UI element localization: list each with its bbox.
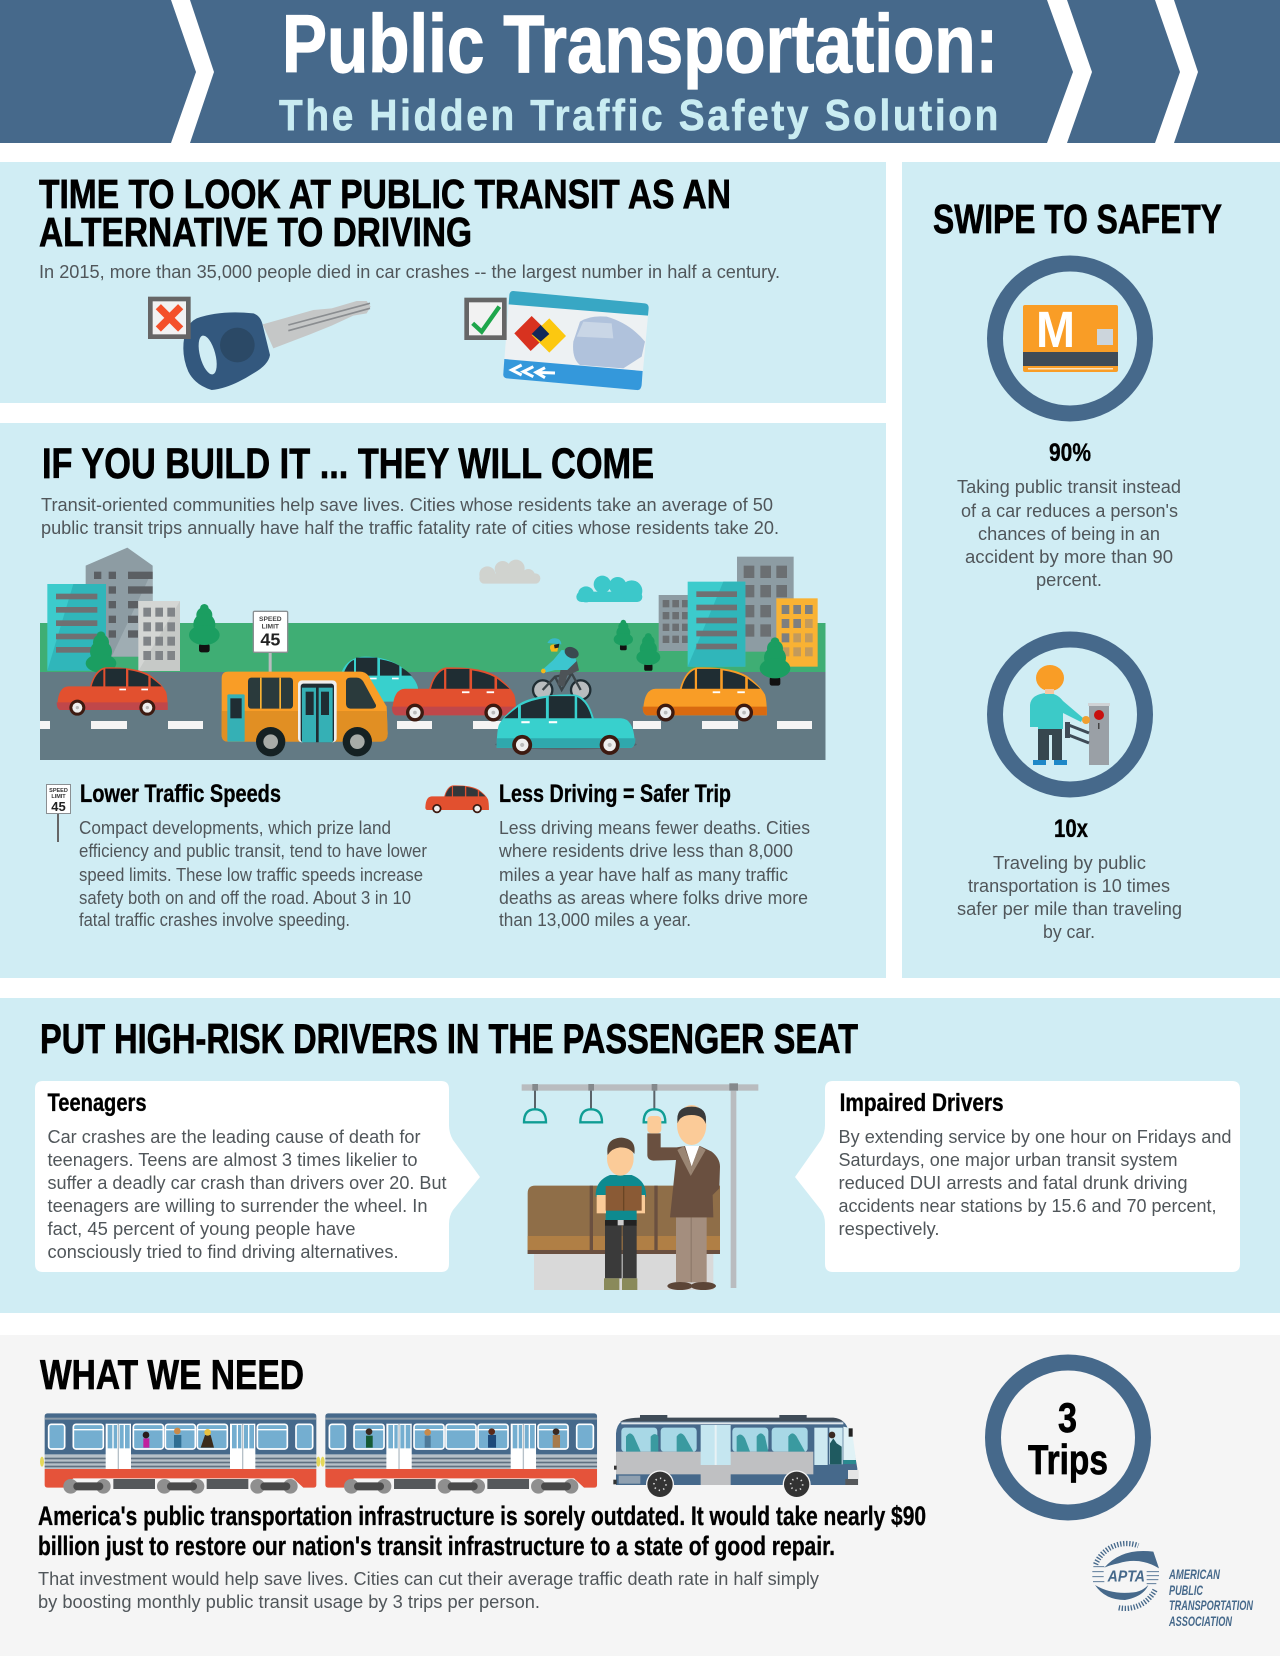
- card text: Car crashes are the leading cause of death for: [48, 1127, 420, 1147]
- text: 90%: [957, 477, 1181, 590]
- bold statement: America's public transportation infrastructure is sorely outdated. It would take nearly $90: [38, 1501, 926, 1531]
- intro text: Transit-oriented communities help save lives. Cities whose residents take an average of 50: [41, 495, 773, 515]
- text: 90%: percent.: [1036, 570, 1102, 590]
- card text: Saturdays, one major urban transit system: [838, 1150, 1178, 1170]
- text: less driving: [498, 818, 810, 930]
- heading: WHAT WE NEED: [40, 1351, 304, 1398]
- logo text: PUBLIC: [1169, 1582, 1204, 1598]
- subtitle: The Hidden Traffic Safety Solution: [279, 91, 1001, 140]
- icon: metro card in ring: [995, 264, 1145, 414]
- heading: ALTERNATIVE TO DRIVING: [39, 209, 472, 255]
- text: investment: That investment would help save lives. Cities can cut their average traffic death rate in half simply: [38, 1569, 819, 1589]
- illustration: passengers on a train: [522, 1083, 758, 1290]
- road: [40, 672, 826, 760]
- text: less driving: deaths as areas where folks drive more: [499, 888, 808, 908]
- callout: impaired drivers: [795, 1081, 1240, 1272]
- icon: small speed limit sign: [46, 784, 70, 842]
- logo text: [1168, 1566, 1254, 1629]
- illustration: train car 2: [321, 1413, 597, 1494]
- bench: [528, 1186, 720, 1290]
- text: less driving: where residents drive less than 8,000: [498, 841, 793, 861]
- logo: APTA: [1092, 1544, 1254, 1629]
- speed limit sign: LIMIT: [262, 623, 279, 630]
- logo text: ASSOCIATION: [1168, 1613, 1233, 1629]
- card title: Teenagers: [48, 1089, 146, 1117]
- icon: metro card in ring: M: [1036, 301, 1075, 358]
- left buildings: [47, 548, 180, 671]
- subheading: lower traffic speeds: Lower Traffic Speeds: [80, 780, 281, 808]
- street scene illustration: [40, 548, 826, 760]
- red car centre: [392, 667, 516, 722]
- heading: IF YOU BUILD IT ... THEY WILL COME: [42, 440, 654, 488]
- bold statement: [38, 1501, 926, 1561]
- panel: high-risk drivers: [0, 998, 1280, 1313]
- heading: [39, 171, 731, 255]
- speed limit sign: 45: [260, 630, 280, 650]
- text: 10x: safer per mile than traveling: [957, 899, 1182, 919]
- logo text: AMERICAN: [1168, 1566, 1221, 1582]
- red car left: [57, 667, 168, 716]
- text: investment: by boosting monthly public transit usage by 3 trips per person.: [38, 1592, 540, 1612]
- clouds: [479, 560, 642, 602]
- cyclist: [533, 638, 590, 700]
- icon: person at turnstile in ring: [995, 640, 1145, 790]
- text: investment: [38, 1569, 819, 1612]
- text: 90%: Taking public transit instead: [957, 477, 1181, 497]
- icon: red cross box: [150, 299, 188, 337]
- heading: PUT HIGH-RISK DRIVERS IN THE PASSENGER SEAT: [40, 1015, 858, 1062]
- text: 90%: of a car reduces a person's: [961, 501, 1178, 521]
- text: less driving: than 13,000 miles a year.: [499, 910, 691, 930]
- trees: [86, 604, 220, 673]
- standing man: [647, 1105, 720, 1290]
- bus: [222, 672, 388, 756]
- bold statement: billion just to restore our nation's transit infrastructure to a state of good repair.: [38, 1531, 835, 1561]
- icon: transit card: [503, 291, 649, 390]
- card text: teenagers. Teens are almost 3 times likelier to: [48, 1150, 418, 1170]
- icon: car key: [183, 301, 371, 390]
- heading: TIME TO LOOK AT PUBLIC TRANSIT AS AN: [39, 171, 731, 217]
- text: less driving: miles a year have half as many traffic: [499, 865, 788, 885]
- stat ring: 3 trips: Trips: [1028, 1436, 1108, 1483]
- text: 90%: accident by more than 90: [965, 547, 1173, 567]
- speed limit sign: SPEED: [259, 616, 282, 623]
- intro text: [41, 495, 779, 538]
- text: 10x: by car.: [1043, 922, 1095, 942]
- card text: reduced DUI arrests and fatal drunk driving: [838, 1173, 1188, 1193]
- text: lower traffic speeds: safety both on and off the road. About 3 in 10: [79, 888, 411, 908]
- text: 10x: transportation is 10 times: [968, 876, 1170, 896]
- teal car behind bus: [342, 657, 418, 702]
- card title: Impaired Drivers: [840, 1089, 1004, 1117]
- text: lower traffic speeds: [79, 818, 427, 930]
- stat: 90%: 90%: [1049, 439, 1091, 467]
- text: lower traffic speeds: speed limits. These low traffic speeds increase: [79, 865, 423, 885]
- logo: APTA: APTA: [1107, 1569, 1145, 1586]
- stat ring: 3 trips: 3: [1058, 1394, 1077, 1441]
- illustration: city bus: [613, 1415, 859, 1498]
- card text: fact, 45 percent of young people have: [48, 1219, 356, 1239]
- intro text: In 2015, more than 35,000 people died in car crashes -- the largest number in half a century.: [39, 262, 780, 282]
- header banner: [0, 0, 1280, 143]
- card text: accidents near stations by 15.6 and 70 percent,: [838, 1196, 1216, 1216]
- speed limit sign: [253, 611, 288, 672]
- card text: [48, 1127, 446, 1262]
- callout: teenagers: [35, 1081, 480, 1272]
- text: lower traffic speeds: fatal traffic crashes involve speeding.: [79, 910, 350, 930]
- intro text: public transit trips annually have half the traffic fatality rate of cities whose residents take 20.: [41, 518, 779, 538]
- stat: 10x: 10x: [1054, 815, 1088, 843]
- card text: consciously tried to find driving alternatives.: [48, 1242, 398, 1262]
- card text: teenagers are willing to surrender the wheel. In: [48, 1196, 427, 1216]
- illustration: train car 1: [40, 1413, 320, 1494]
- icon: green check box: [467, 300, 504, 338]
- card text: [838, 1127, 1232, 1239]
- orange car: [643, 667, 767, 722]
- lane markings: [40, 721, 812, 729]
- text: lower traffic speeds: Compact developments, which prize land: [79, 818, 391, 838]
- trees right: [614, 620, 790, 686]
- panel: what we need: [0, 1335, 1280, 1656]
- title: Public Transportation:: [282, 0, 998, 90]
- stat ring: 3 trips: [993, 1362, 1143, 1512]
- icon: small speed limit sign: SPEED: [49, 788, 68, 794]
- text: 90%: chances of being in an: [978, 524, 1160, 544]
- seated man reading: [596, 1138, 646, 1290]
- teal car front: [495, 694, 637, 755]
- right buildings: [659, 557, 818, 667]
- card text: respectively.: [838, 1219, 940, 1239]
- panel: if you build it: [0, 423, 886, 978]
- icon: small speed limit sign: LIMIT: [51, 794, 66, 800]
- card text: By extending service by one hour on Fridays and: [838, 1127, 1232, 1147]
- icon: small speed limit sign: 45: [51, 799, 66, 814]
- icon: small red car: [425, 785, 489, 813]
- handrail and straps: [522, 1083, 758, 1288]
- text: lower traffic speeds: efficiency and public transit, tend to have lower: [79, 841, 427, 861]
- subheading: less driving: Less Driving = Safer Trip: [499, 780, 731, 808]
- panel: time to look at public transit: [0, 162, 886, 403]
- text: 10x: Traveling by public: [993, 853, 1146, 873]
- text: 10x: [957, 853, 1182, 942]
- panel: swipe to safety: [902, 162, 1280, 978]
- text: less driving: Less driving means fewer deaths. Cities: [499, 818, 810, 838]
- card text: suffer a deadly car crash than drivers over 20. But: [48, 1173, 446, 1193]
